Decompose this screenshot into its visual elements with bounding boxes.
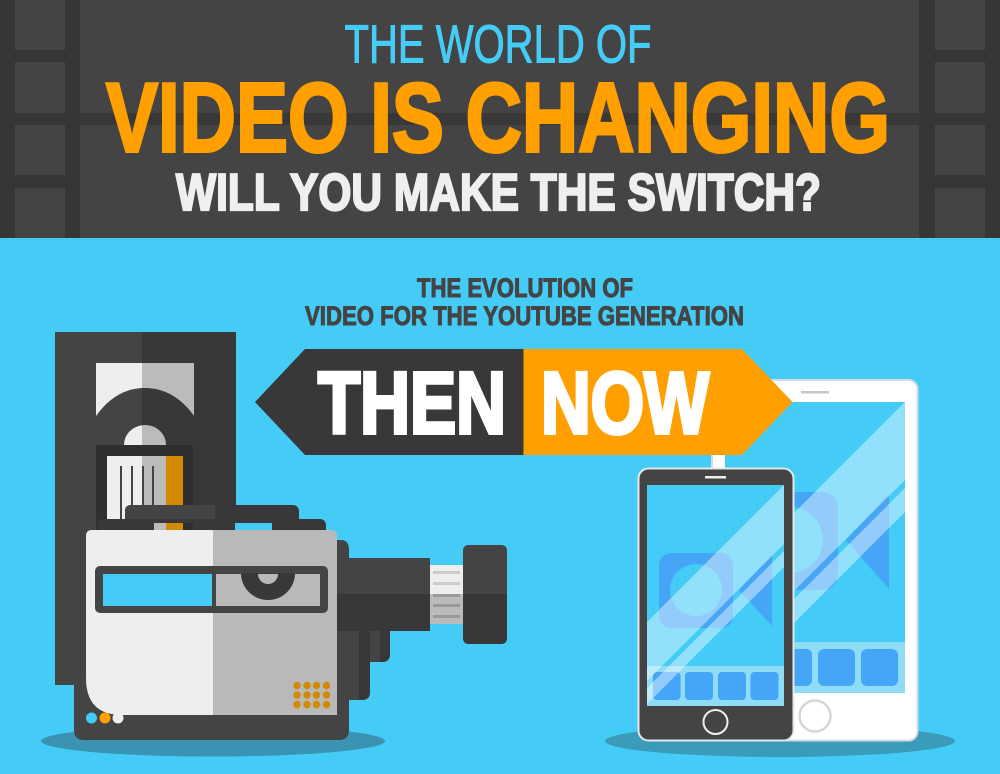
icon: smartphone: [638, 468, 794, 740]
icon: VHS tape: [55, 332, 236, 685]
arrow: then: [255, 349, 524, 455]
camera top handle: [98, 505, 326, 539]
icon: video camera: [74, 505, 507, 740]
camera lens barrel: [337, 558, 430, 631]
camera lower steps: [337, 594, 370, 700]
title line 1: THE WORLD OF: [344, 14, 652, 74]
camera body: [86, 530, 337, 715]
arrow: now: [524, 349, 792, 455]
phone app bar: [647, 666, 784, 706]
tablet speaker: [801, 391, 829, 394]
phone speaker: [705, 476, 726, 478]
shadow: devices: [605, 725, 955, 757]
header panel: film strip: [0, 0, 1000, 238]
tablet home button: [800, 700, 830, 732]
lens ring: [430, 565, 463, 624]
phone home button: [704, 710, 728, 734]
phone video icon: [659, 553, 772, 628]
phone glare: [640, 485, 784, 711]
shadow: camera: [41, 726, 385, 756]
tablet video icon: [794, 492, 889, 590]
viewfinder strip: [95, 566, 328, 613]
camera indicator lights: [86, 712, 124, 724]
sign: then and now: [255, 349, 792, 455]
label: then: THEN: [318, 355, 506, 452]
tablet app bar: [725, 642, 905, 693]
icon: tablet: [711, 379, 918, 742]
camera speaker dots: [293, 682, 330, 708]
title line 3: WILL YOU MAKE THE SWITCH?: [176, 164, 821, 222]
subtitle: THE EVOLUTION OF: [417, 273, 633, 303]
camera base: [74, 540, 349, 740]
lens cap: [463, 545, 507, 644]
subtitle: [305, 273, 744, 331]
tape window: [96, 445, 193, 545]
tape label: [96, 363, 194, 445]
title: [106, 14, 890, 222]
subtitle: VIDEO FOR THE YOUTUBE GENERATION: [305, 301, 744, 331]
label: now: NOW: [541, 355, 710, 452]
tablet glare: [794, 402, 905, 622]
